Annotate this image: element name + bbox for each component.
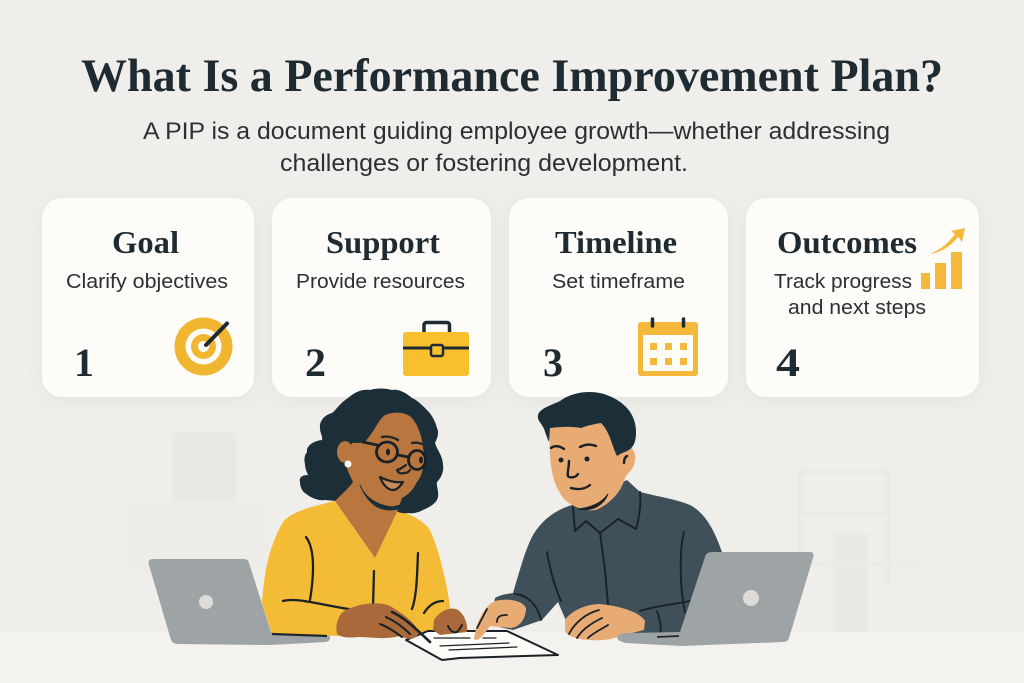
hair [538, 392, 636, 456]
laptop: left [148, 559, 330, 645]
number 4: 4 [776, 340, 800, 385]
panel: Timeline card [509, 198, 728, 397]
face and neck [335, 413, 424, 558]
text: Track progress and next steps: Track progress [774, 271, 912, 293]
document on desk [406, 631, 558, 660]
icon: briefcase [403, 322, 469, 376]
icon: target with dart [174, 318, 232, 376]
left laptop keyboard edge [272, 634, 327, 636]
hair [300, 388, 443, 513]
text: Track progress and next steps [774, 271, 926, 319]
card shadows [42, 202, 979, 401]
heading: Outcomes: Outcomes [777, 224, 917, 260]
man's hands [474, 600, 645, 640]
desk surface [0, 632, 1024, 683]
number 2: 2 [305, 340, 326, 385]
collar and shirt seams [515, 492, 690, 632]
sweater fold lines [283, 537, 443, 613]
number 3: 3 [543, 340, 563, 385]
panel: Support card [272, 198, 491, 397]
person: woman in yellow sweater [262, 388, 451, 636]
background: faded office furniture [124, 432, 918, 648]
shirt [490, 480, 722, 640]
panel: Goal card [42, 198, 254, 397]
jaw shadow [360, 485, 410, 510]
heading: Goal: Goal [112, 224, 179, 260]
icon: rising bar chart with arrow [921, 228, 965, 289]
subtitle [143, 118, 890, 177]
ear and earring [337, 441, 353, 468]
subtitle: challenges or fostering development. [280, 150, 688, 177]
laptop: right [617, 552, 814, 646]
text: Track progress and next steps: and next steps [788, 297, 926, 319]
heading: Support: Support [326, 224, 440, 260]
facial features [551, 445, 627, 510]
panel: Outcomes card [746, 198, 979, 397]
eyebrows, nose and mouth [380, 437, 422, 490]
text: Clarify objectives: Clarify objectives [66, 271, 228, 293]
text: Set timeframe: Set timeframe [552, 271, 685, 293]
title: What Is a Performance Improvement Plan? [81, 50, 943, 102]
glasses [363, 442, 426, 470]
face [549, 421, 635, 510]
sweater [262, 501, 451, 636]
subtitle: A PIP is a document guiding employee growth—whether addressing [143, 118, 890, 145]
number 1: 1 [74, 340, 94, 385]
icon: calendar [638, 319, 698, 376]
text: Provide resources: Provide resources [296, 271, 465, 293]
heading: Timeline: Timeline [555, 224, 677, 260]
person: man in dark shirt [490, 392, 722, 640]
woman's hands and pen [336, 603, 467, 642]
